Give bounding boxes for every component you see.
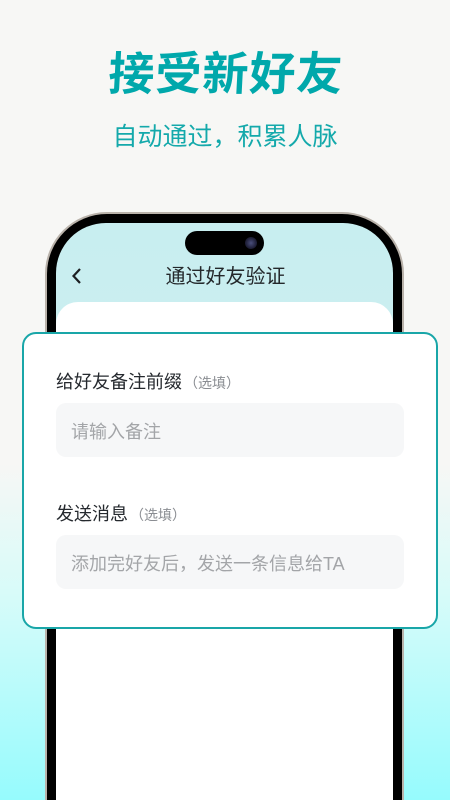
placeholder: 添加完好友后，发送一条信息给TA [71, 554, 345, 574]
input: remark [56, 403, 404, 457]
phone screen [56, 223, 393, 800]
phone bezel [47, 214, 402, 800]
form card [22, 332, 438, 629]
input: message [56, 535, 404, 589]
dynamic island [185, 231, 264, 255]
subtitle: 自动通过，积累人脉 [112, 123, 338, 151]
title: 接受新好友 [107, 48, 345, 100]
phone mockup [45, 212, 404, 800]
screen title: 通过好友验证 [166, 266, 286, 288]
white content sheet [56, 302, 393, 800]
camera lens [245, 237, 257, 249]
label: remark prefix: 给好友备注前缀（选填） [56, 372, 240, 392]
label: send message: 发送消息（选填） [56, 504, 186, 524]
back arrow [72, 268, 81, 284]
placeholder: 请输入备注 [71, 422, 161, 442]
